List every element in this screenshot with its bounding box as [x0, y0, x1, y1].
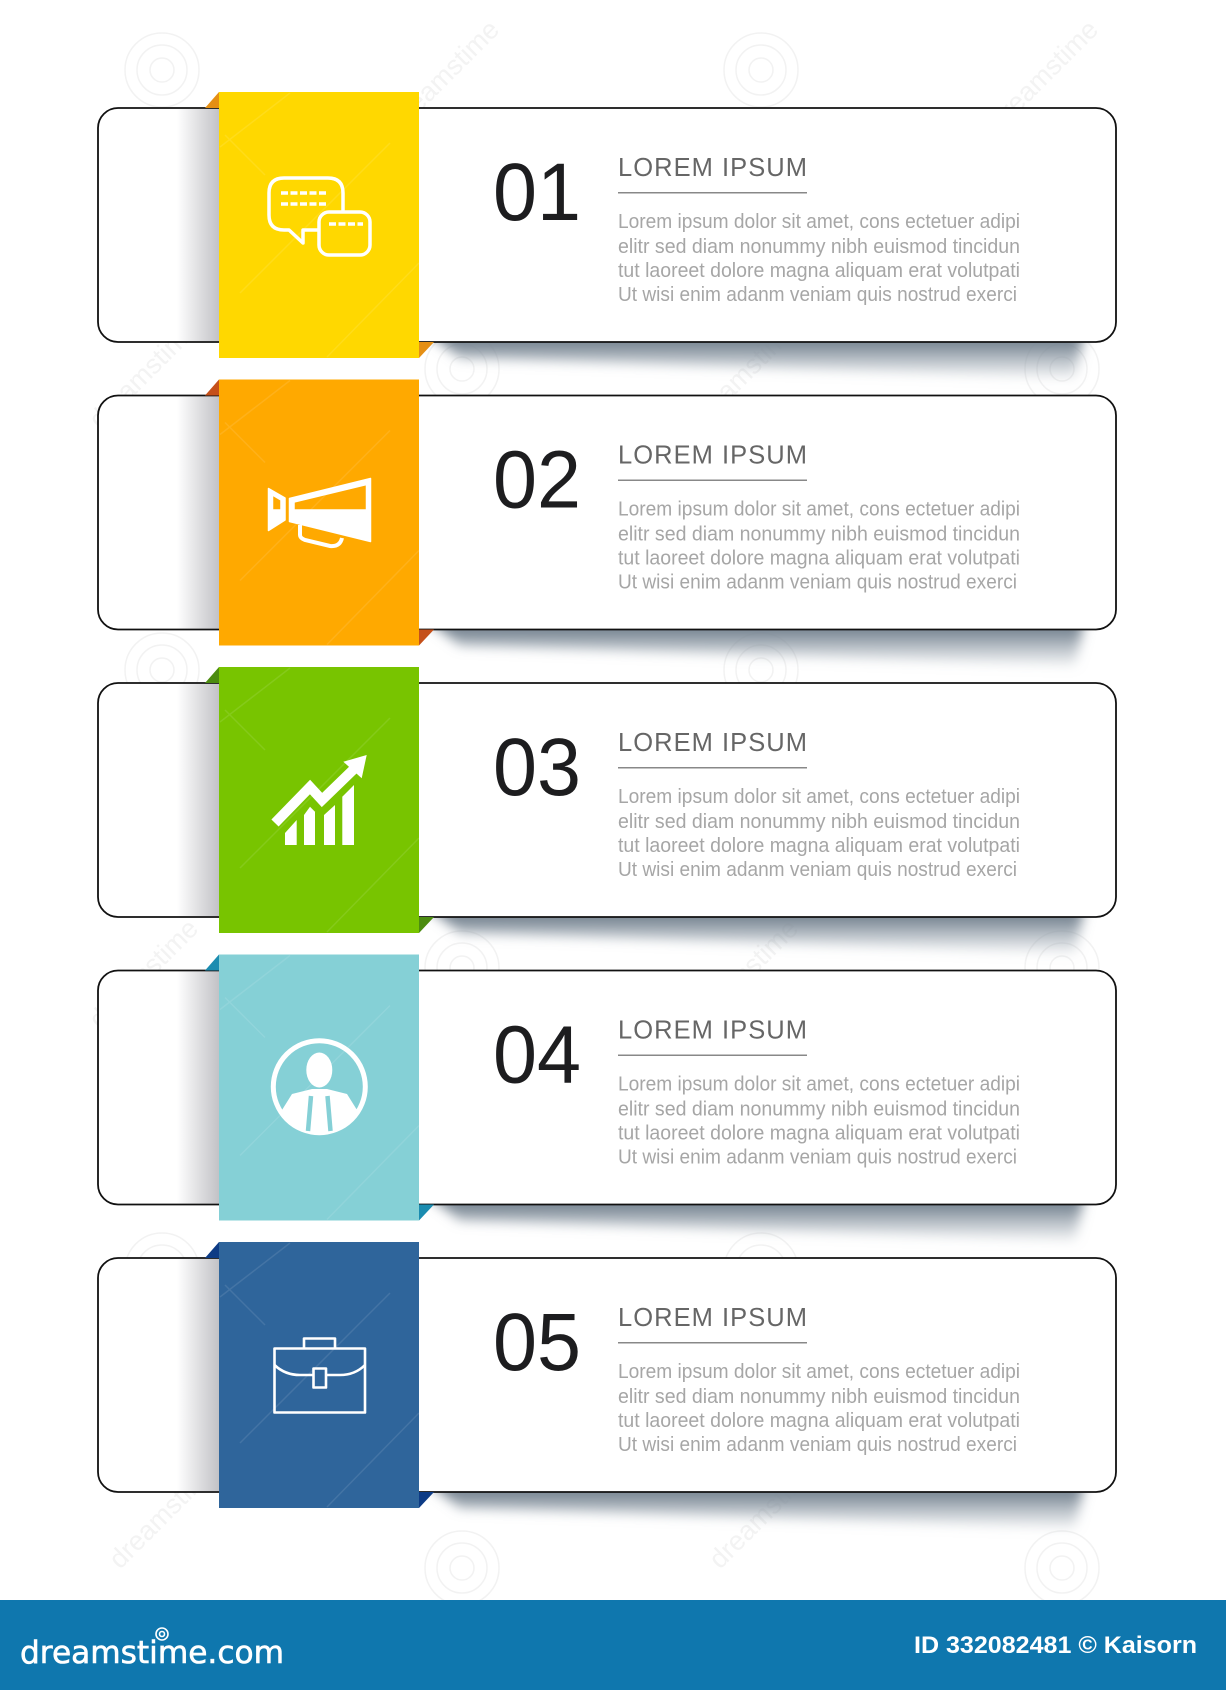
body text 01: Lorem ipsum dolor sit amet, cons ectetuer adipi [618, 210, 1020, 233]
colour tab 02 [219, 380, 419, 646]
watermark: spirals and site name: dreamstime [703, 1453, 824, 1574]
body text 05: Ut wisi enim adanm veniam quis nostrud exerci [618, 1433, 1017, 1456]
number 01: 01 [493, 147, 581, 238]
colour tab 03 [219, 667, 419, 933]
number 05: 05 [493, 1297, 581, 1388]
panel: step 04 [98, 954, 1116, 1240]
body text 01: tut laoreet dolore magna aliquam erat volutpati [618, 259, 1020, 282]
icon: chat bubbles [269, 178, 370, 255]
body text 04: Lorem ipsum dolor sit amet, cons ectetuer adipi [618, 1072, 1020, 1096]
body text 02: Ut wisi enim adanm veniam quis nostrud exerci [618, 570, 1017, 594]
watermark: spirals and site name: dreamstime [83, 913, 204, 1034]
body text 03: Ut wisi enim adanm veniam quis nostrud exerci [618, 858, 1017, 881]
body text 05: elitr sed diam nonummy nibh euismod tincidun [618, 1385, 1020, 1408]
body text 02 [618, 498, 1020, 594]
icon: growth chart [275, 755, 367, 845]
panel: step 02 [98, 380, 1116, 666]
panel: step 03 [98, 667, 1116, 953]
number 02: 02 [493, 434, 581, 526]
body text 05: tut laoreet dolore magna aliquam erat volutpati [618, 1409, 1020, 1432]
body text 05 [618, 1360, 1020, 1456]
icon: megaphone [268, 478, 370, 546]
footer logo: dreamstime.com [20, 1635, 284, 1671]
heading 05: LOREM IPSUM [618, 1304, 807, 1332]
watermark: spirals and site name: dreamstime [83, 313, 204, 434]
body text 03: elitr sed diam nonummy nibh euismod tincidun [618, 810, 1020, 833]
heading 03: LOREM IPSUM [618, 729, 807, 757]
footer credit: ID 332082481 © Kaisorn [914, 1632, 1197, 1659]
panel: step 01 [98, 92, 1116, 378]
body text 03 [618, 785, 1020, 881]
body text 01 [618, 210, 1020, 306]
body text 02: elitr sed diam nonummy nibh euismod tincidun [618, 522, 1020, 546]
icon: briefcase [274, 1338, 365, 1412]
body text 04: elitr sed diam nonummy nibh euismod tincidun [618, 1098, 1020, 1120]
watermark: spirals and site name: dreamstime [683, 913, 804, 1034]
body text 04: tut laoreet dolore magna aliquam erat volutpati [618, 1122, 1020, 1144]
body text 04: Ut wisi enim adanm veniam quis nostrud exerci [618, 1146, 1017, 1168]
heading 01: LOREM IPSUM [618, 154, 807, 182]
number 03: 03 [493, 722, 581, 813]
body text 01: elitr sed diam nonummy nibh euismod tincidun [618, 235, 1020, 258]
body text 03: tut laoreet dolore magna aliquam erat volutpati [618, 834, 1020, 857]
footer bar [0, 1600, 1226, 1690]
watermark: spirals and site name: dreamstime [983, 14, 1104, 135]
colour tab 01 [219, 92, 419, 358]
number 04: 04 [493, 1010, 581, 1100]
watermark: spirals and site name [83, 14, 1104, 1605]
body text 02: Lorem ipsum dolor sit amet, cons ectetuer adipi [618, 498, 1020, 520]
body text 01: Ut wisi enim adanm veniam quis nostrud exerci [618, 283, 1017, 306]
watermark: spirals and site name: dreamstime [103, 1453, 224, 1574]
body text 04 [618, 1072, 1020, 1168]
colour tab 05 [219, 1242, 419, 1508]
heading 04: LOREM IPSUM [618, 1016, 807, 1044]
heading 02: LOREM IPSUM [618, 442, 807, 470]
body text 05: Lorem ipsum dolor sit amet, cons ectetuer adipi [618, 1360, 1020, 1383]
body text 03: Lorem ipsum dolor sit amet, cons ectetuer adipi [618, 785, 1020, 808]
icon: businessman [273, 1041, 365, 1133]
watermark: spirals and site name: dreamstime [384, 14, 505, 135]
colour tab 04 [219, 954, 419, 1220]
watermark: spirals and site name: dreamstime [683, 313, 804, 434]
panel: step 05 [98, 1242, 1116, 1528]
body text 02: tut laoreet dolore magna aliquam erat volutpati [618, 546, 1020, 570]
